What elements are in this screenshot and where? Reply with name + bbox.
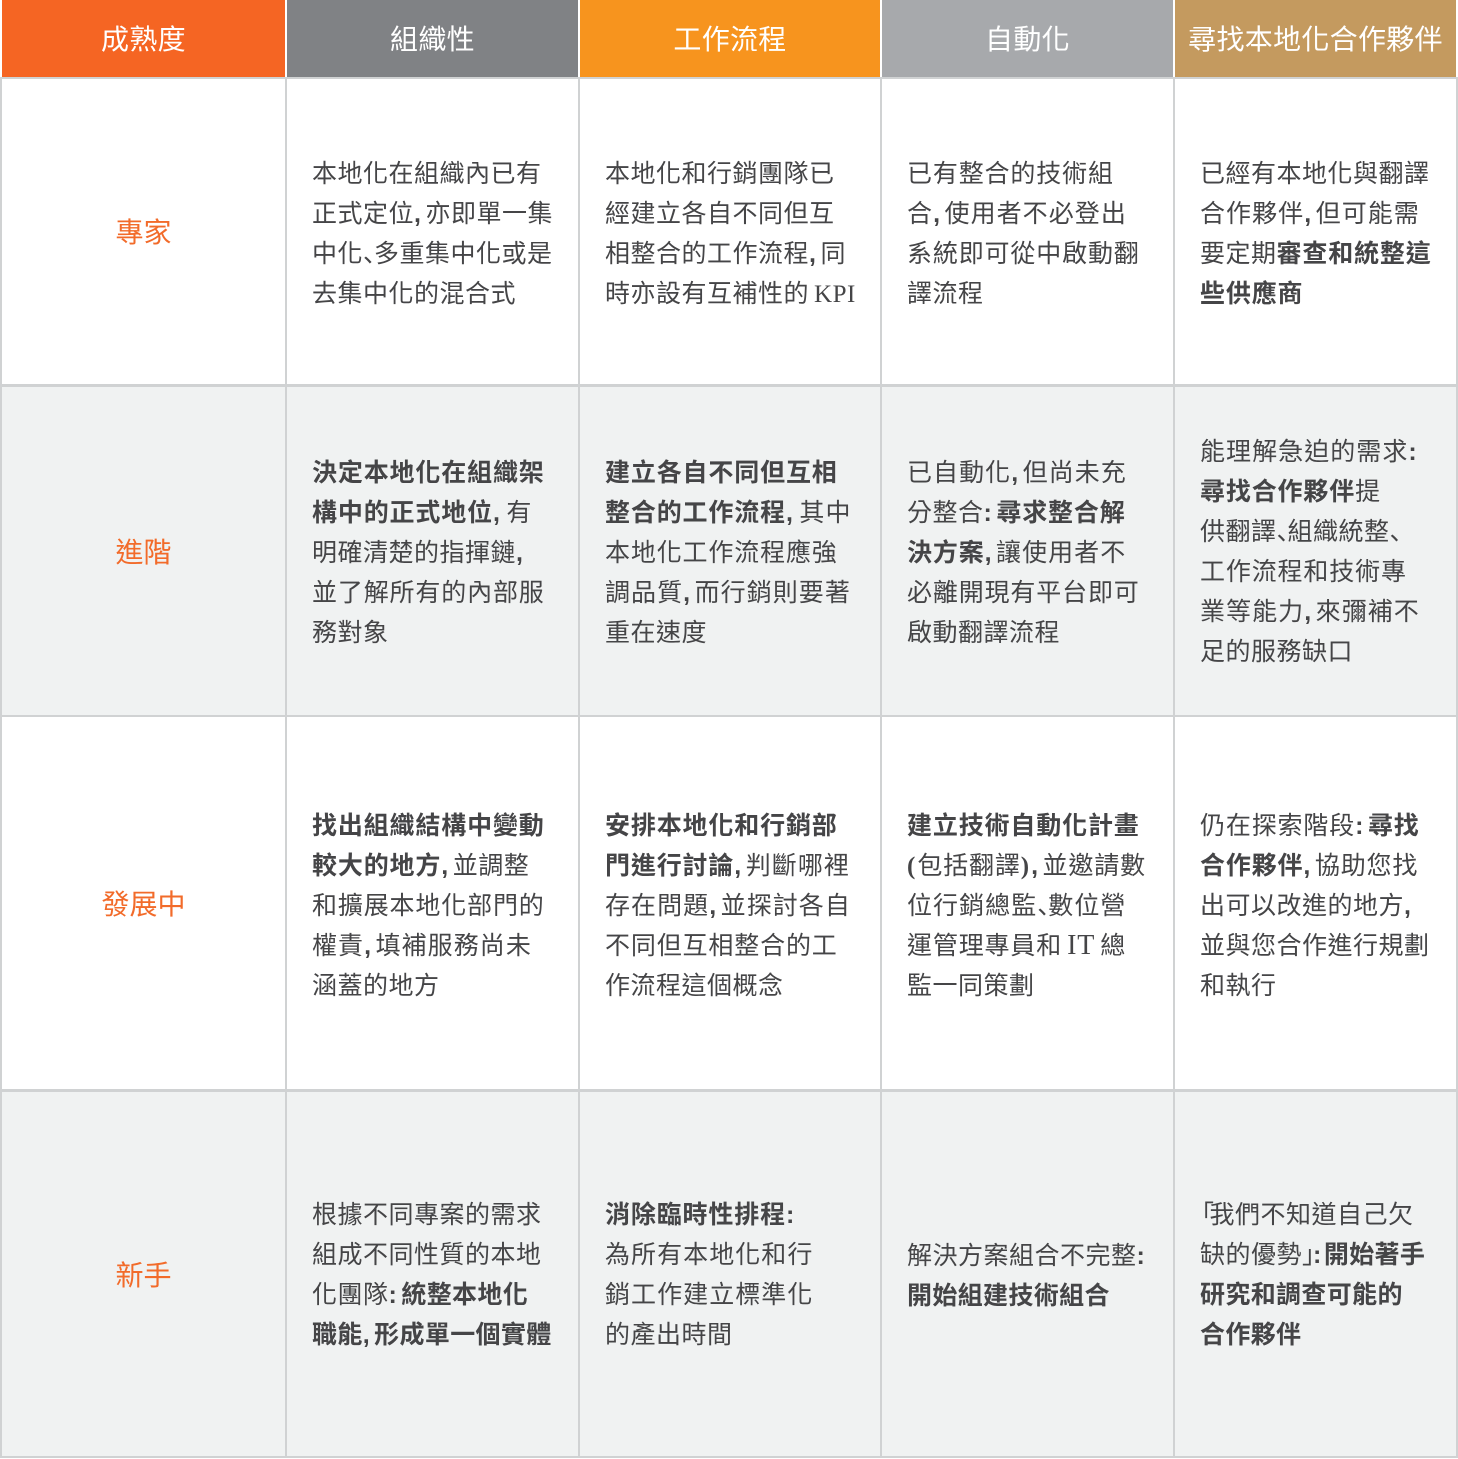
cell: expert partner: 合作夥伴,但可能需 [1200, 200, 1420, 228]
header: automation: 自動化 [985, 24, 1070, 55]
cell: developing automation: (包括翻譯),並邀請數 [907, 852, 1146, 880]
cell: expert partner: 要定期審查和統整這 [1200, 240, 1432, 268]
cell: expert automation: 譯流程 [907, 280, 984, 308]
cell: expert workflow: 時亦設有互補性的KPI [605, 280, 856, 308]
cell: developing workflow: 門進行討論,判斷哪裡 [605, 852, 850, 880]
cell: expert organization: 本地化在組織內已有 [312, 160, 542, 188]
cell: advanced workflow [580, 387, 880, 715]
cell: advanced partner: 足的服務缺口 [1200, 638, 1353, 666]
cell: developing partner: 出可以改進的地方, [1200, 892, 1415, 920]
row label: advanced: 進階 [115, 537, 172, 568]
cell: expert organization: 去集中化的混合式 [312, 280, 516, 308]
cell: developing workflow: 安排本地化和行銷部 [605, 812, 838, 840]
cell: advanced organization: 並了解所有的內部服 [312, 579, 545, 607]
cell: advanced partner [1175, 387, 1456, 715]
cell: beginner partner [1175, 1092, 1456, 1456]
cell: developing organization: 較大的地方,並調整 [312, 852, 529, 880]
cell: advanced organization: 決定本地化在組織架 [312, 459, 545, 487]
header: maturity [2, 0, 285, 77]
cell: expert partner [1200, 160, 1432, 308]
cell: developing partner: 並與您合作進行規劃 [1200, 932, 1430, 960]
cell: developing partner: 合作夥伴,協助您找 [1200, 852, 1418, 880]
cell: advanced automation: 分整合:尋求整合解 [907, 499, 1126, 527]
cell: expert partner: 些供應商 [1200, 280, 1303, 308]
cell: developing automation: 位行銷總監、數位營 [907, 886, 1126, 922]
cell: beginner organization: 根據不同專案的需求 [312, 1201, 542, 1229]
cell: developing workflow: 作流程這個概念 [605, 972, 784, 1000]
cell: expert workflow: 相整合的工作流程,同 [605, 240, 846, 268]
cell: expert automation: 合,使用者不必登出 [907, 200, 1127, 228]
cell: advanced workflow: 重在速度 [605, 619, 707, 647]
cell: expert organization [312, 160, 553, 308]
cell: developing partner: 仍在探索階段:尋找 [1200, 812, 1420, 840]
cell: advanced partner: 工作流程和技術專 [1200, 558, 1407, 586]
cell: developing partner [1200, 812, 1430, 1000]
cell: beginner workflow: 為所有本地化和行 [605, 1241, 813, 1269]
cell: advanced partner: 供翻譯、組織統整、 [1200, 512, 1401, 548]
cell: beginner organization: 化團隊:統整本地化 [312, 1281, 528, 1309]
cell: developing workflow: 存在問題,並探討各自 [605, 892, 851, 920]
cell: developing organization: 找出組織結構中變動 [312, 812, 545, 840]
cell: advanced organization [287, 387, 578, 715]
row label: expert: 專家 [115, 217, 172, 248]
cell: expert automation [907, 160, 1140, 308]
cell: expert organization: 正式定位,亦即單一集 [312, 200, 553, 228]
cell: advanced organization: 明確清楚的指揮鏈, [312, 539, 527, 567]
cell: beginner partner: 研究和調查可能的 [1200, 1281, 1403, 1309]
cell: advanced organization: 構中的正式地位,有 [312, 499, 532, 527]
header: automation [882, 0, 1173, 77]
cell: developing organization: 和擴展本地化部門的 [312, 892, 545, 920]
cell: developing automation: 監一同策劃 [907, 972, 1035, 1000]
cell: developing organization: 涵蓋的地方 [312, 972, 440, 1000]
cell: expert partner: 已經有本地化與翻譯 [1200, 160, 1430, 188]
header: organization [287, 0, 578, 77]
cell: developing workflow [605, 812, 851, 1000]
cell: expert organization: 中化、多重集中化或是 [312, 234, 553, 270]
cell: expert workflow [605, 160, 856, 308]
cell: expert workflow: 本地化和行銷團隊已 [605, 160, 835, 188]
cell: advanced automation: 啟動翻譯流程 [907, 619, 1060, 647]
cell: advanced workflow: 調品質,而行銷則要著 [605, 579, 851, 607]
cell: beginner partner: 合作夥伴 [1200, 1321, 1301, 1349]
header: localization partner [1175, 0, 1456, 77]
cell: advanced organization: 務對象 [312, 619, 389, 647]
cell: beginner workflow: 銷工作建立標準化 [605, 1281, 813, 1309]
row label: beginner [2, 1092, 285, 1456]
cell: beginner organization [287, 1092, 578, 1456]
cell: beginner workflow: 消除臨時性排程: [605, 1201, 799, 1229]
row label: beginner: 新手 [115, 1260, 172, 1291]
row label: developing: 發展中 [101, 889, 186, 920]
cell: advanced automation: 必離開現有平台即可 [907, 579, 1140, 607]
header: maturity: 成熟度 [101, 24, 186, 55]
cell: beginner partner: 缺的優勢」:開始著手 [1200, 1241, 1425, 1269]
cell: beginner organization: 組成不同性質的本地 [312, 1241, 542, 1269]
cell: beginner workflow: 的產出時間 [605, 1321, 733, 1349]
cell: beginner automation [882, 1092, 1173, 1456]
cell: developing automation [907, 812, 1146, 1000]
cell: beginner organization: 職能,形成單一個實體 [312, 1321, 552, 1349]
cell: advanced partner: 業等能力,來彌補不 [1200, 598, 1420, 626]
row label: advanced [2, 387, 285, 715]
cell: advanced workflow: 本地化工作流程應強 [605, 539, 838, 567]
cell: developing automation: 運管理專員和IT總 [907, 930, 1126, 961]
cell: developing organization [312, 812, 545, 1000]
cell: beginner partner: 「我們不知道自己欠 [1189, 1201, 1414, 1229]
cell: expert automation: 系統即可從中啟動翻 [907, 240, 1140, 268]
cell: developing workflow: 不同但互相整合的工 [605, 932, 838, 960]
cell: advanced partner: 能理解急迫的需求: [1200, 438, 1421, 466]
cell: beginner automation: 解決方案組合不完整: [907, 1242, 1149, 1270]
cell: developing partner: 和執行 [1200, 972, 1277, 1000]
cell: advanced automation: 已自動化,但尚未充 [907, 459, 1127, 487]
cell: expert workflow: 經建立各自不同但互 [605, 200, 835, 228]
cell: advanced partner: 尋找合作夥伴提 [1200, 478, 1381, 506]
header: organization: 組織性 [390, 24, 475, 55]
cell: developing automation: 建立技術自動化計畫 [907, 812, 1140, 840]
header: workflow [580, 0, 880, 77]
cell: beginner workflow [580, 1092, 880, 1456]
cell: advanced automation [882, 387, 1173, 715]
cell: beginner automation: 開始組建技術組合 [907, 1282, 1110, 1310]
cell: advanced automation: 決方案,讓使用者不 [907, 539, 1126, 567]
header: localization partner: 尋找本地化合作夥伴 [1188, 24, 1443, 55]
cell: expert automation: 已有整合的技術組 [907, 160, 1114, 188]
cell: advanced workflow: 整合的工作流程,其中 [605, 499, 852, 527]
cell: developing organization: 權責,填補服務尚未 [312, 932, 532, 960]
cell: advanced workflow: 建立各自不同但互相 [605, 459, 838, 487]
header: workflow: 工作流程 [673, 24, 787, 55]
